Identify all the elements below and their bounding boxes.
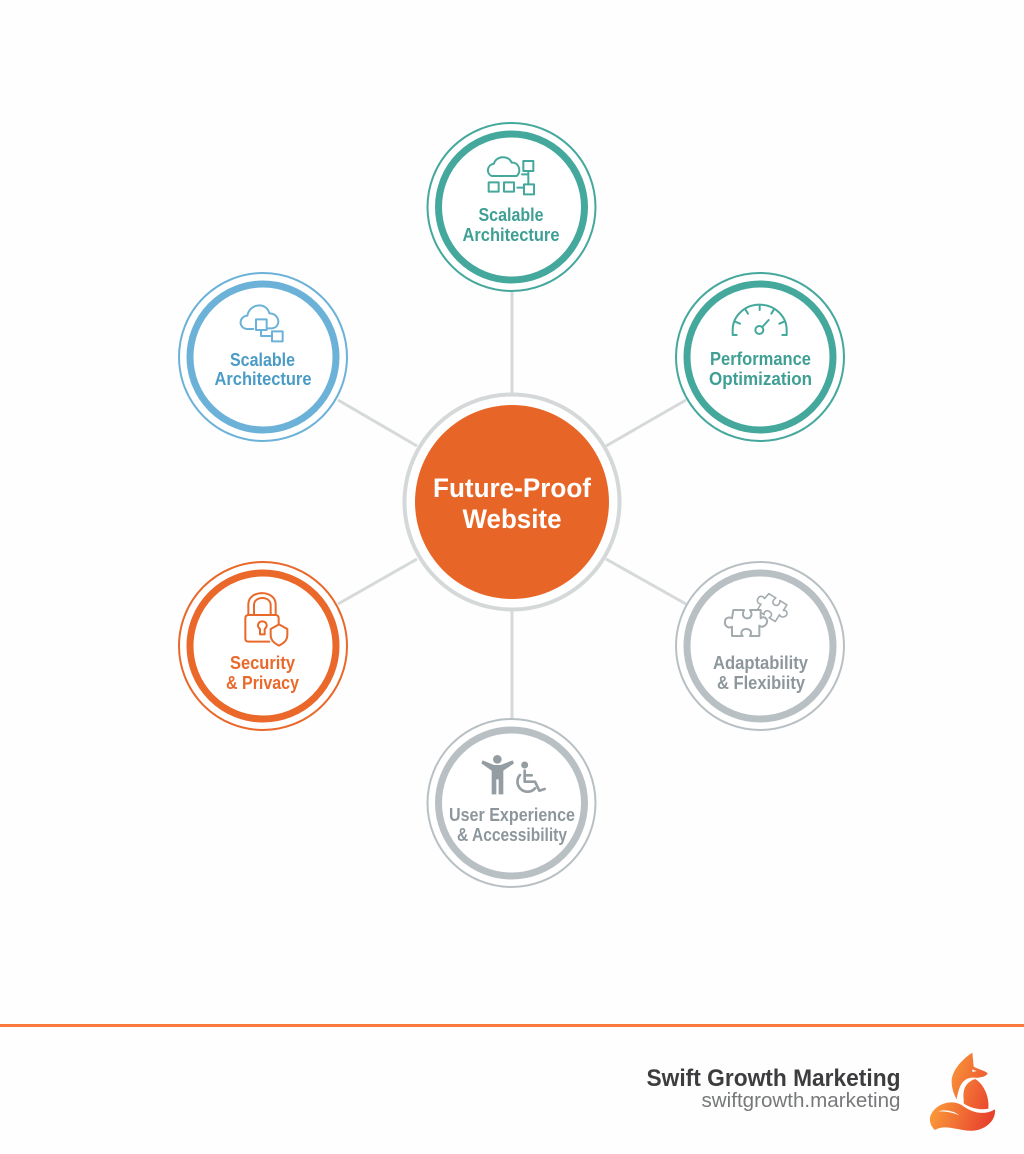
icon: padlock and shield [245, 593, 287, 646]
label: & Accessibility [457, 825, 567, 845]
icon: fox logo [930, 1053, 995, 1131]
icon: person and wheelchair user [481, 755, 545, 794]
label: Architecture [214, 369, 312, 389]
icon: puzzle pieces [725, 590, 791, 636]
label [226, 653, 299, 693]
label: Performance [710, 349, 811, 369]
icon: cloud network [488, 157, 534, 194]
label: Architecture [462, 225, 560, 245]
central hub: Future-Proof Website: Future-Proof [433, 473, 592, 503]
label [713, 653, 808, 693]
node: User Experience & Accessibility (gray, bottom) [428, 719, 596, 887]
label: Scalable [230, 350, 295, 370]
icon: cloud with linked squares [241, 305, 283, 341]
central hub: Future-Proof Website [404, 394, 620, 610]
label: & Privacy [226, 673, 299, 693]
node: Adaptability & Flexibility (gray, right) [676, 562, 844, 730]
node: Scalable Architecture (blue, left) [179, 273, 347, 441]
label: Adaptability [713, 653, 808, 673]
icon: speedometer [733, 305, 787, 335]
central hub: Future-Proof Website: Website [462, 504, 562, 534]
label [214, 350, 312, 389]
label: Optimization [709, 369, 812, 389]
label: Security [230, 653, 295, 673]
footer brand text [646, 1065, 900, 1112]
connector lines [338, 292, 686, 718]
label [462, 205, 560, 245]
node: Security & Privacy (orange, left) [179, 562, 347, 730]
footer divider [0, 1024, 1024, 1027]
label [709, 349, 812, 389]
node: Scalable Architecture (teal, top) [428, 123, 596, 291]
label: User Experience [449, 805, 575, 825]
label: Scalable [478, 205, 544, 225]
footer brand text: swiftgrowth.marketing [702, 1090, 900, 1112]
label: & Flexibiity [717, 673, 805, 693]
footer brand text: Swift Growth Marketing [646, 1065, 900, 1092]
node: Performance Optimization (teal, right) [676, 273, 844, 441]
label [449, 805, 575, 845]
